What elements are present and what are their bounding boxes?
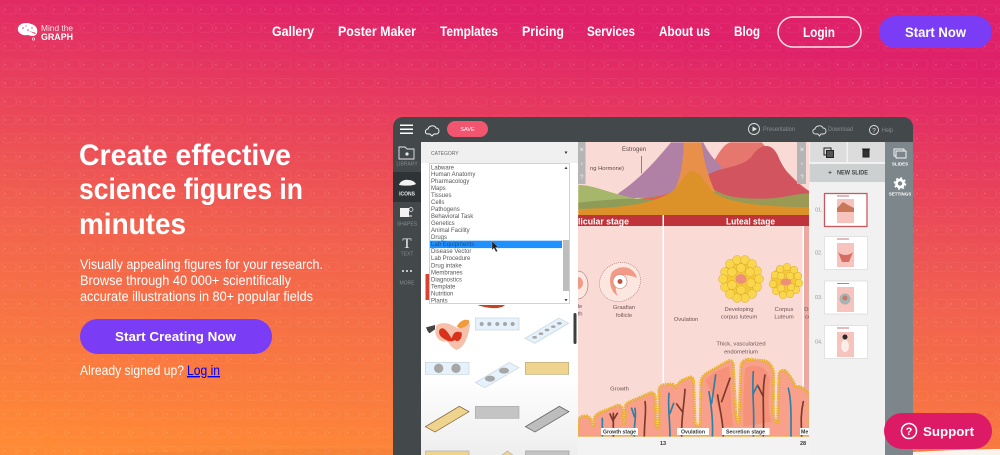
category dropdown list: Nutrition bbox=[431, 292, 453, 298]
heading bbox=[79, 139, 303, 241]
figure labels: Thick, vascularized bbox=[716, 342, 766, 348]
figure labels: follicle bbox=[616, 313, 632, 319]
login prompt: Log in bbox=[187, 362, 220, 378]
endometrium illustration bbox=[578, 359, 810, 437]
category dropdown list: Lab Equipments bbox=[431, 242, 474, 248]
red icon peeking behind list bbox=[426, 274, 430, 300]
heading: science figures in bbox=[79, 173, 303, 206]
heading: Create effective bbox=[79, 139, 291, 172]
category dropdown list: Drugs bbox=[431, 235, 447, 241]
navigation menu: Pricing bbox=[522, 23, 564, 39]
category dropdown list: Template bbox=[431, 284, 456, 290]
stage title band bbox=[578, 215, 809, 228]
left tool sidebar: TEXT bbox=[401, 252, 413, 258]
navigation menu: Templates bbox=[440, 23, 498, 39]
icon library panel bbox=[421, 142, 578, 455]
stage tags: Secretion stage bbox=[726, 430, 765, 436]
timeline numbers: 28 bbox=[800, 441, 806, 447]
left tool sidebar: LIBRARY bbox=[396, 162, 418, 168]
button: Start Now: Start Now bbox=[905, 24, 966, 40]
stage tags: Growth stage bbox=[603, 430, 636, 436]
app screenshot bbox=[393, 117, 913, 455]
figure labels: endometrium bbox=[724, 350, 758, 356]
canvas side controls left: ✕ bbox=[579, 148, 584, 154]
stage title band: Luteal stage bbox=[726, 216, 775, 228]
figure labels: th bbox=[578, 312, 582, 318]
science figure canvas: Estrogen bbox=[622, 147, 646, 153]
stage tags: Me bbox=[801, 430, 808, 436]
figure labels: Corpus bbox=[775, 307, 793, 313]
figure labels: De bbox=[804, 307, 812, 313]
category dropdown list: Membranes bbox=[431, 270, 463, 276]
stage title band: licular stage bbox=[578, 216, 629, 228]
science figure canvas bbox=[568, 142, 812, 455]
app header bar: SAVE bbox=[460, 127, 475, 133]
figure labels: Developing bbox=[724, 307, 754, 313]
category dropdown list: Plants bbox=[431, 298, 448, 304]
logo: Mind the Graph bbox=[18, 23, 73, 43]
navigation menu bbox=[272, 23, 760, 39]
stage tags: Ovulation bbox=[681, 430, 705, 436]
right settings sidebar bbox=[885, 142, 913, 455]
description text: accurate illustrations in 80+ popular fields bbox=[80, 288, 313, 304]
stage tags bbox=[601, 428, 809, 436]
category dropdown list: Human Anatomy bbox=[431, 172, 475, 178]
button: Login: Login bbox=[803, 24, 835, 40]
right settings sidebar: SETTINGS bbox=[889, 192, 911, 196]
navigation menu: Poster Maker bbox=[338, 23, 416, 39]
slide thumbnail 2 bbox=[815, 236, 868, 270]
category dropdown list: Maps bbox=[431, 186, 446, 192]
category dropdown list: Labware bbox=[431, 166, 455, 172]
canvas side controls right: ? bbox=[800, 175, 804, 181]
canvas side controls right bbox=[797, 142, 806, 184]
support button: ? bbox=[906, 426, 913, 438]
canvas side controls left bbox=[578, 142, 586, 184]
navigation menu: About us bbox=[659, 23, 710, 39]
figure labels bbox=[578, 304, 812, 392]
app header bar bbox=[393, 117, 913, 142]
app header bar: Presentation bbox=[763, 127, 795, 133]
description text: Browse through 40 000+ scientifically bbox=[80, 272, 291, 288]
slide thumbnail 3: 03. bbox=[815, 295, 823, 301]
button: Start Creating Now: Start Creating Now bbox=[115, 329, 237, 344]
left tool sidebar: T bbox=[402, 236, 412, 252]
figure labels: Luteum bbox=[774, 314, 794, 320]
figure labels: le bbox=[578, 304, 582, 310]
slide thumbnail 1 bbox=[815, 194, 867, 226]
timeline numbers: 13 bbox=[660, 441, 666, 447]
category dropdown list: Pharmacology bbox=[431, 179, 469, 185]
scroll thumb bbox=[574, 313, 576, 344]
category dropdown list: Pathogens bbox=[431, 207, 460, 213]
icon library panel: CATEGORY bbox=[431, 151, 459, 157]
slide thumbnail 4 bbox=[815, 326, 868, 358]
canvas side controls right: ‹ bbox=[801, 162, 803, 168]
hormone chart bbox=[578, 142, 810, 215]
new slide button: + bbox=[828, 170, 832, 176]
logo: Mind the Graph: GRAPH bbox=[41, 32, 73, 43]
button: Start Now bbox=[879, 16, 992, 48]
category dropdown list: Drug intake bbox=[431, 263, 462, 269]
navigation menu: Blog bbox=[734, 23, 760, 39]
heading: minutes bbox=[79, 208, 186, 241]
slide thumbnail 2: 02. bbox=[815, 250, 823, 256]
figure labels: Graafian bbox=[613, 305, 635, 311]
science figure canvas: ng Hormone) bbox=[590, 166, 624, 172]
button: Login bbox=[778, 17, 861, 47]
navigation menu: Services bbox=[587, 23, 635, 39]
support button: Support bbox=[923, 424, 975, 439]
Graafian follicle bbox=[578, 262, 641, 302]
canvas side controls right: ✕ bbox=[799, 148, 805, 154]
left tool sidebar: MORE bbox=[400, 280, 415, 286]
left tool sidebar: SHAPES bbox=[397, 222, 418, 228]
new slide button: NEW SLIDE bbox=[837, 170, 868, 176]
category dropdown list: Animal Facility bbox=[431, 228, 470, 234]
login prompt: Already signed up? bbox=[80, 362, 184, 378]
figure labels: Ovulation bbox=[674, 317, 698, 323]
button: Start Creating Now bbox=[80, 319, 272, 354]
description text: Visually appealing figures for your research. bbox=[80, 256, 323, 272]
slide thumbnail 3 bbox=[815, 281, 868, 314]
description text bbox=[80, 256, 323, 304]
category dropdown list: Diagnostics bbox=[431, 277, 462, 283]
left tool sidebar bbox=[393, 142, 421, 455]
logo: Mind the Graph: Mind the bbox=[41, 23, 73, 33]
navigation menu: Gallery bbox=[272, 23, 314, 39]
corpus luteum bbox=[718, 256, 803, 302]
figure labels: co bbox=[805, 314, 811, 320]
app header bar: ? bbox=[872, 128, 876, 134]
category dropdown list: Cells bbox=[431, 200, 444, 206]
category dropdown list: Behavioral Task bbox=[431, 214, 474, 220]
slide thumbnail 4: 04. bbox=[815, 340, 823, 346]
canvas side controls left: › bbox=[581, 162, 583, 168]
category dropdown list: Genetics bbox=[431, 221, 455, 227]
timeline numbers bbox=[578, 437, 809, 455]
support button bbox=[884, 413, 992, 449]
category dropdown list bbox=[430, 164, 570, 304]
figure labels: Growth bbox=[610, 386, 629, 392]
category dropdown list: Lab Procedure bbox=[431, 256, 471, 262]
app header bar: Help bbox=[882, 127, 893, 134]
new slide button bbox=[810, 164, 885, 182]
figure labels: corpus luteum bbox=[721, 314, 757, 320]
category dropdown list: Disease Vector bbox=[431, 249, 471, 255]
right settings sidebar: SLIDES bbox=[892, 162, 908, 166]
category dropdown list: Tissues bbox=[431, 193, 451, 199]
left tool sidebar: ICONS bbox=[399, 192, 416, 198]
illustration thumbnails grid bbox=[425, 305, 569, 455]
slides panel bbox=[809, 142, 885, 455]
canvas side controls left: ? bbox=[580, 175, 584, 181]
slide thumbnail 1: 01. bbox=[815, 208, 823, 214]
app header bar: Download bbox=[828, 127, 853, 133]
